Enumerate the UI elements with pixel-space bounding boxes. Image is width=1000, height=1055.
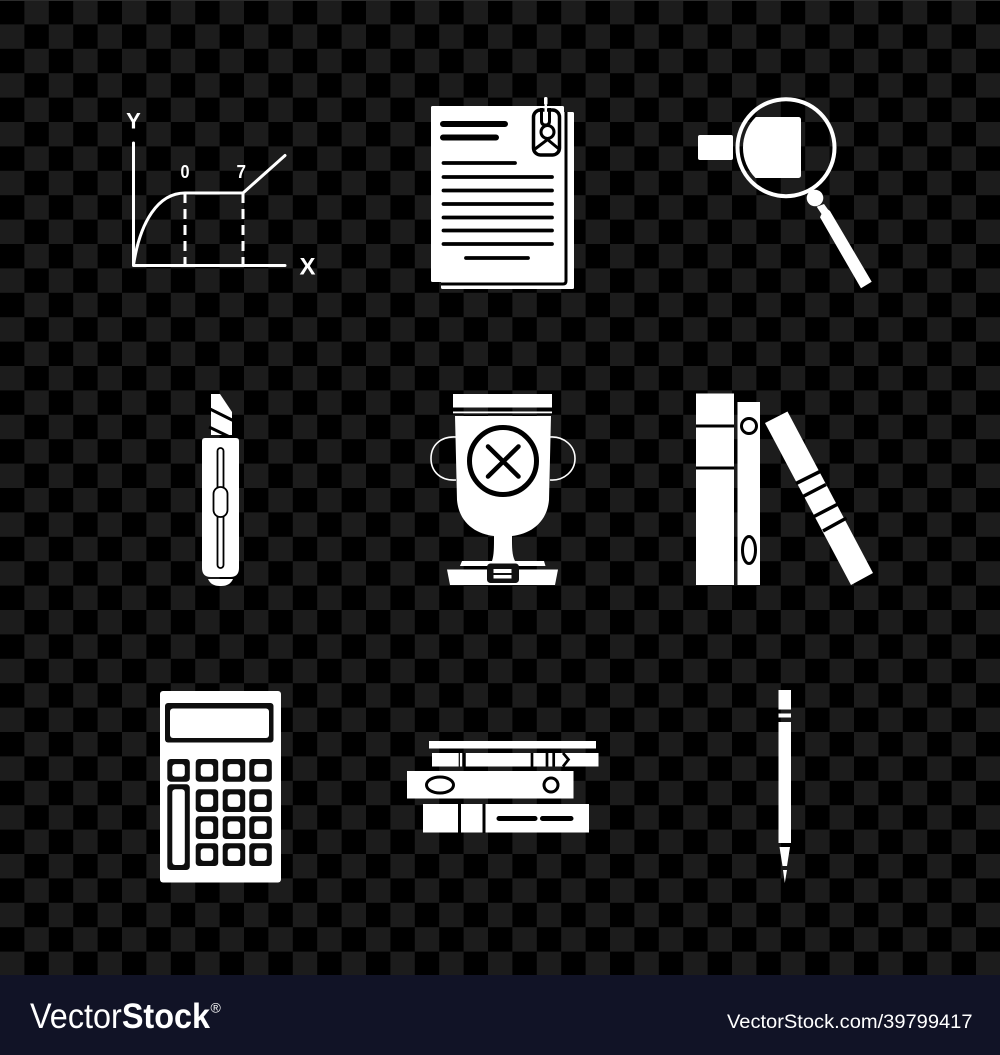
back page bbox=[441, 112, 574, 289]
cross badge bbox=[470, 428, 536, 494]
graph dashed guides bbox=[185, 193, 243, 265]
icon: stack of books bbox=[407, 741, 598, 833]
axis label Y: Y bbox=[126, 108, 141, 134]
image id: VectorStock.com/39799417 bbox=[727, 1012, 972, 1033]
pencil eraser bbox=[778, 690, 791, 710]
tick label 0: 0 bbox=[180, 162, 190, 182]
leaning book bbox=[765, 412, 873, 585]
graph axes bbox=[134, 143, 285, 266]
icon: utility knife bbox=[202, 394, 239, 586]
tick label 7: 7 bbox=[236, 162, 246, 182]
pencil point bbox=[783, 870, 787, 883]
trophy handles bbox=[431, 437, 575, 480]
icon: function graph bbox=[126, 108, 316, 280]
bottom book bbox=[423, 804, 589, 832]
registered mark: ® bbox=[210, 1000, 222, 1016]
icon: magnifying glass bbox=[698, 99, 872, 288]
base plate badge bbox=[487, 564, 519, 583]
slider track bbox=[218, 448, 224, 568]
trophy cup and stem bbox=[455, 416, 551, 561]
object outside the lens bbox=[698, 135, 733, 160]
third book bbox=[407, 771, 574, 798]
top book bbox=[429, 741, 596, 748]
footer band bbox=[0, 975, 1000, 1055]
object inside the lens bbox=[743, 117, 801, 178]
calculator body bbox=[160, 691, 281, 882]
brand logo: VectorStock bbox=[30, 997, 210, 1036]
trophy base bbox=[460, 561, 546, 566]
calculator keys bbox=[167, 759, 272, 870]
blade bbox=[211, 394, 232, 435]
pencil shaft bbox=[778, 722, 791, 843]
handle bbox=[807, 190, 872, 288]
icon: pencil bbox=[778, 690, 791, 883]
icon: resume document with clip bbox=[431, 97, 574, 289]
second book bbox=[432, 753, 598, 766]
trophy rim bbox=[453, 394, 552, 408]
icon: standing books bbox=[696, 394, 873, 585]
icon: calculator bbox=[160, 691, 281, 882]
pencil ferrule band bbox=[778, 714, 791, 718]
book two bbox=[738, 402, 760, 585]
lens ring bbox=[738, 99, 834, 196]
book one bbox=[696, 394, 734, 585]
end cap bbox=[208, 579, 233, 586]
pencil tip bbox=[780, 847, 790, 866]
graph curve bbox=[134, 156, 285, 265]
photo clip bbox=[534, 110, 560, 155]
icon: trophy with cross bbox=[431, 394, 575, 585]
front page bbox=[431, 106, 564, 282]
calculator screen bbox=[165, 703, 274, 742]
text lines bbox=[443, 124, 505, 138]
knife body bbox=[202, 438, 239, 577]
axis label X: X bbox=[299, 254, 316, 280]
slider button bbox=[214, 487, 228, 517]
